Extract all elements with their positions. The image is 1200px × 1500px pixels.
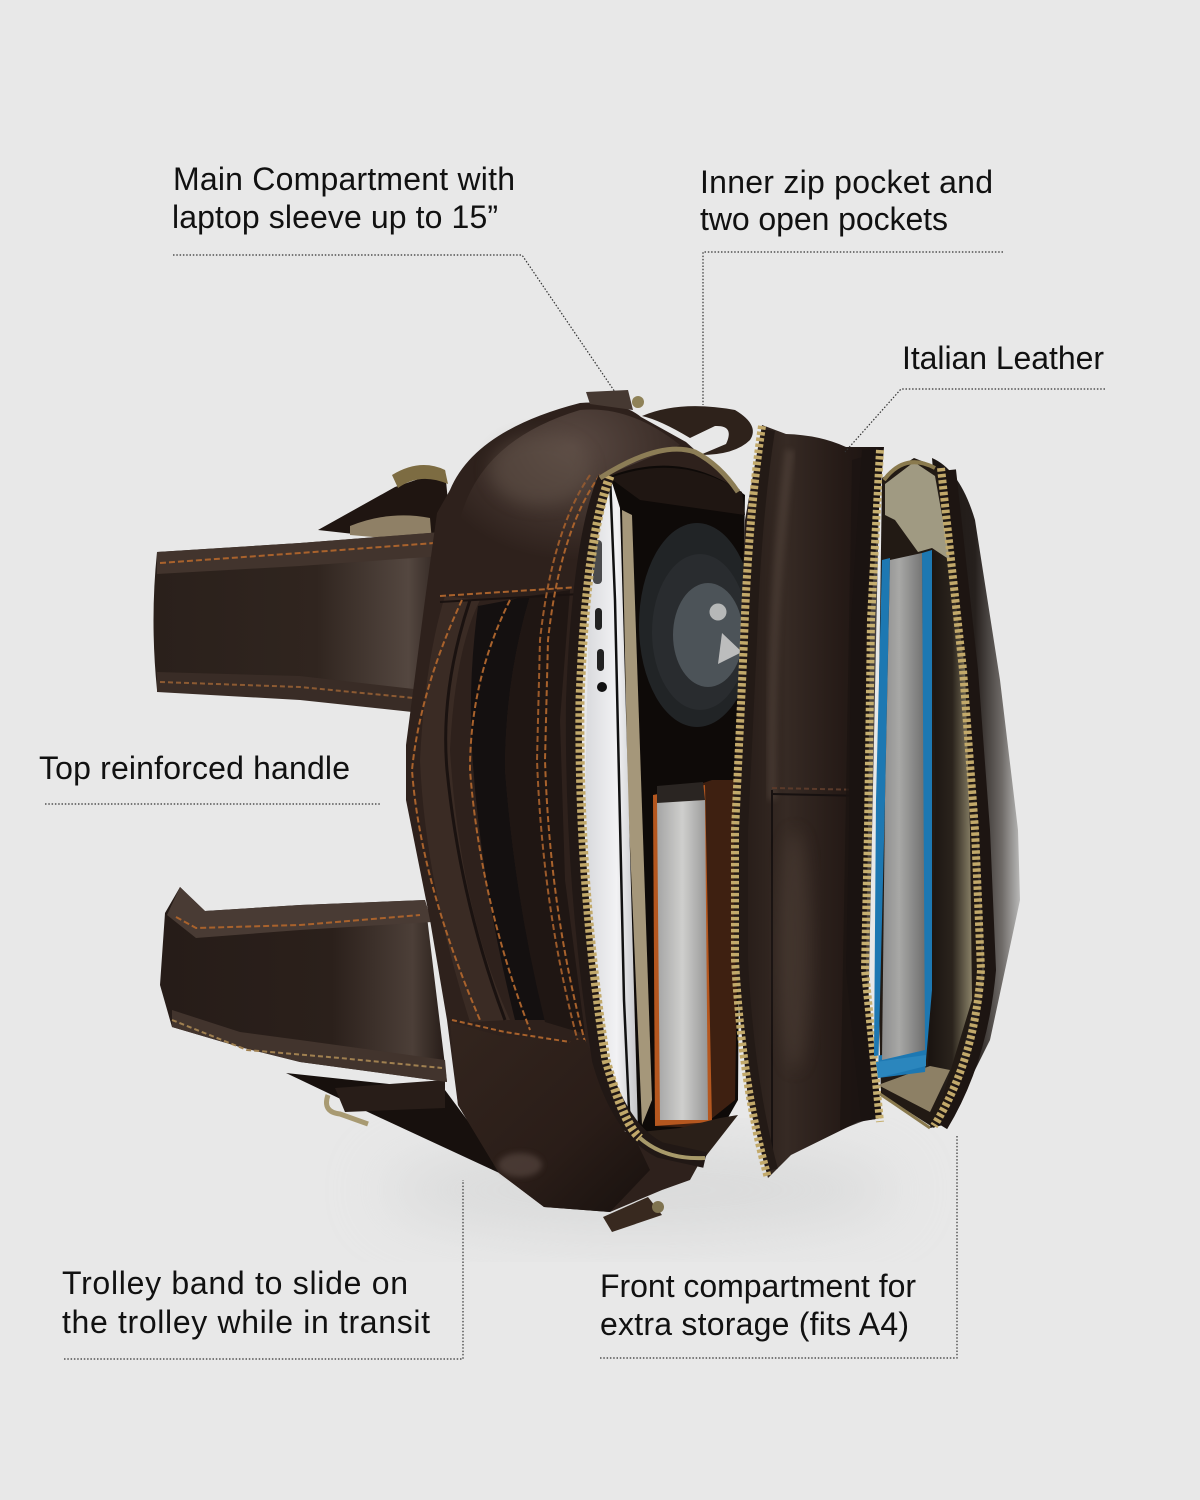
main compartment zipper [574, 449, 738, 1160]
top tab with brass stud [586, 390, 644, 410]
leader line: front compartment [600, 1135, 957, 1358]
middle compartment left zipper [735, 426, 772, 1178]
label: inner zip pocket: two open pockets [700, 201, 948, 237]
laptop [585, 476, 638, 1132]
lower interior and gold edge [640, 1115, 738, 1156]
leader line: main compartment [173, 255, 615, 392]
illustration: open backpack seen from above [154, 390, 1020, 1232]
bottom shoulder strap [160, 887, 510, 1178]
outer shell [930, 458, 1020, 1128]
lining strip beside book [928, 550, 972, 1105]
label: front compartment: Front compartment for [600, 1268, 916, 1304]
label: Italian leather: Italian Leather [902, 340, 1104, 376]
middle compartment panel [734, 425, 884, 1178]
beige sleeve [622, 510, 652, 1125]
label: main compartment: Main Compartment with [173, 161, 515, 197]
label: front compartment: extra storage (fits A4) [600, 1306, 909, 1342]
leader line: trolley band [64, 1180, 463, 1359]
label: trolley band: the trolley while in transit [62, 1304, 430, 1340]
main compartment interior [585, 466, 755, 1158]
middle compartment right zipper [853, 450, 880, 1122]
label: trolley band: Trolley band to slide on [62, 1265, 408, 1301]
leader line: inner zip pocket [703, 252, 1003, 405]
beige lining [885, 462, 950, 560]
front compartment [874, 458, 1020, 1128]
front zipper [880, 462, 990, 1128]
dark interior [876, 458, 982, 1128]
lower strap buckle [326, 1095, 368, 1124]
speaker [639, 523, 755, 727]
label: top handle: Top reinforced handle [39, 750, 350, 786]
leader line: Italian leather [845, 389, 1105, 452]
top carry loop [642, 406, 753, 455]
top shoulder strap [154, 465, 452, 715]
label: main compartment: laptop sleeve up to 15” [172, 199, 498, 235]
blue book [874, 550, 932, 1078]
soft shadow under backpack [380, 1145, 900, 1235]
leader line: top handle [45, 803, 380, 805]
label: inner zip pocket: Inner zip pocket and [700, 164, 993, 200]
orange hardcover book [653, 780, 740, 1128]
bottom tab with brass stud [603, 1197, 664, 1232]
front handle and left body panel [406, 403, 740, 1212]
